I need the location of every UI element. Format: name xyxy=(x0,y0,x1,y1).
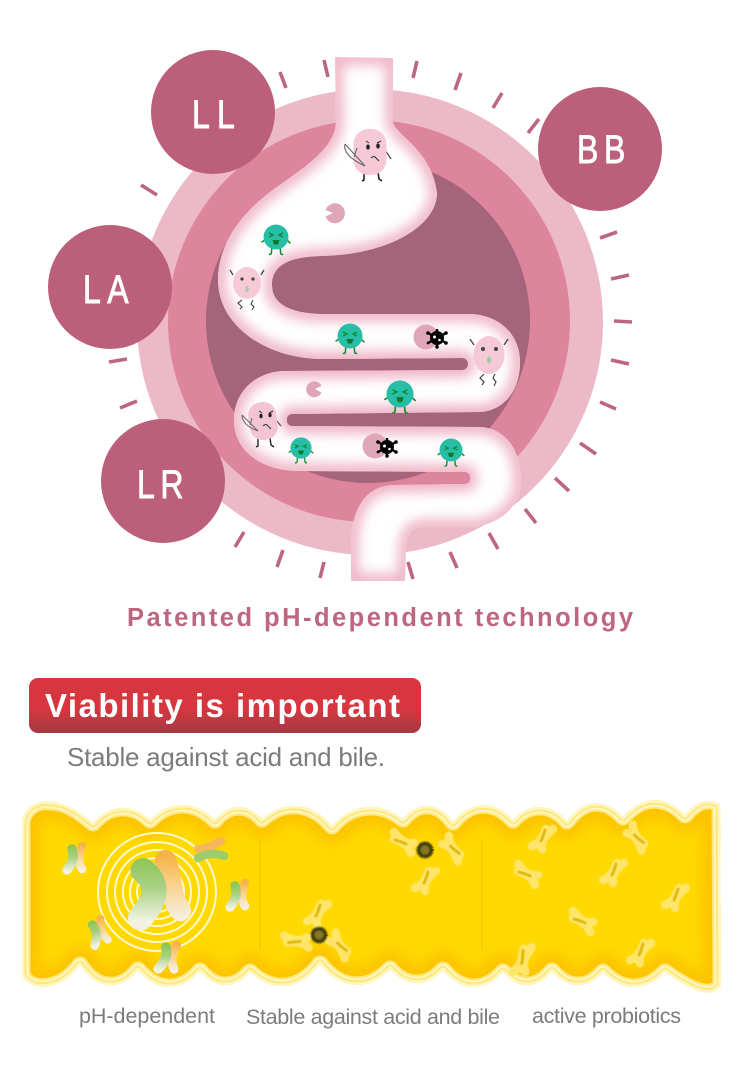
circle: LL xyxy=(151,50,275,174)
icon: horizontal gummy pair xyxy=(198,841,224,858)
character: pink round right xyxy=(470,336,508,386)
radial tick marks xyxy=(109,60,632,579)
icon: bacteria being eaten top xyxy=(414,324,448,350)
character: green microbes xyxy=(262,224,464,466)
panel: yellow intestine band xyxy=(22,800,721,992)
concentric pink circles xyxy=(137,89,603,555)
icon: large gummy pair xyxy=(140,860,180,918)
character: pink archer lower xyxy=(242,400,281,447)
icon: concentric rings xyxy=(98,833,216,951)
heading: patented technology: Patented pH-dependent technology xyxy=(127,604,634,632)
badge: viability heading: Viability is important xyxy=(45,687,400,724)
circle: BB xyxy=(538,87,662,211)
circle: LR: LR xyxy=(137,462,189,507)
circle: LL: LL xyxy=(192,92,242,137)
caption: stable against acid and bile: Stable against acid and bile xyxy=(246,1005,500,1029)
icon: pacman probiotics xyxy=(306,203,345,397)
caption: pH-dependent: pH-dependent xyxy=(79,1004,215,1028)
intestine tract xyxy=(218,57,521,581)
icon: bacteria being eaten bottom xyxy=(362,434,398,458)
character: pink round left xyxy=(230,267,264,310)
subheading: Stable against acid and bile. xyxy=(67,742,385,772)
caption: active probiotics: active probiotics xyxy=(532,1004,681,1028)
icon: panel two probiotics and viruses xyxy=(284,832,465,958)
circle: LR xyxy=(101,419,225,543)
circle: LA xyxy=(48,225,172,349)
badge: viability heading xyxy=(29,678,421,733)
icon: panel three probiotics xyxy=(509,824,686,974)
circle: BB: BB xyxy=(577,127,631,172)
character: pink archer top xyxy=(345,129,391,181)
icon: active gummies xyxy=(67,841,245,970)
circle: LA: LA xyxy=(83,267,135,312)
